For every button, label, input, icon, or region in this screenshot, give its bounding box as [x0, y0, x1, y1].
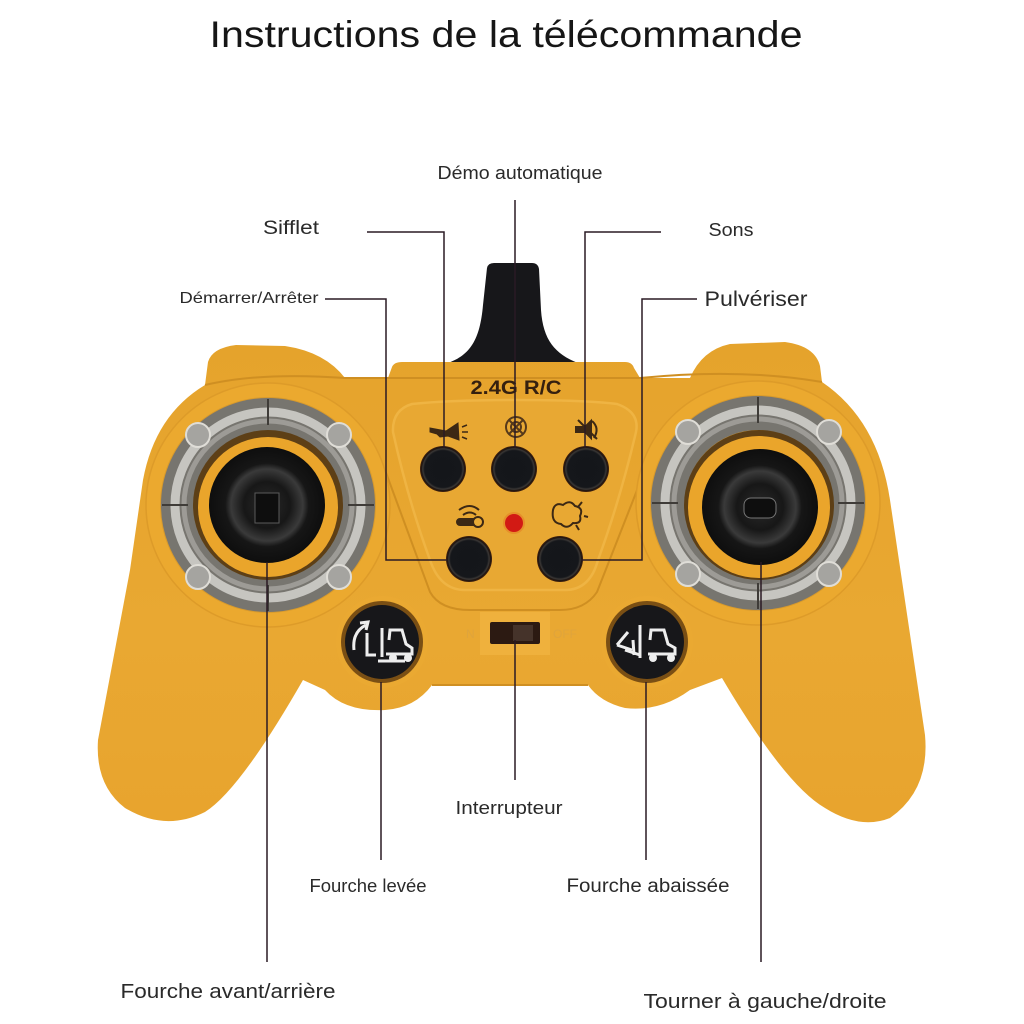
label: 2.4G R/C: 2.4G R/C — [470, 378, 562, 399]
label: Fourche avant/arrière: Fourche avant/arrière — [120, 981, 336, 1003]
body shading — [205, 374, 822, 685]
label: Démo automatique: Démo automatique — [438, 163, 602, 183]
icon: demo — [506, 417, 526, 437]
panel buttons — [420, 446, 609, 582]
callout lines — [267, 200, 761, 962]
right joystick — [636, 381, 880, 625]
remote controller — [98, 263, 926, 822]
label: Fourche levée: Fourche levée — [310, 876, 426, 896]
icon: horn — [430, 423, 468, 440]
label: Démarrer/Arrêter: Démarrer/Arrêter — [180, 290, 319, 307]
label: Interrupteur: Interrupteur — [456, 798, 562, 818]
red LED — [504, 513, 524, 533]
label: Fourche abaissée: Fourche abaissée — [566, 876, 730, 897]
label: Sons: Sons — [708, 220, 754, 240]
icon: sound off — [576, 420, 597, 439]
forklift up button — [336, 596, 428, 688]
power switch: N — [466, 627, 475, 641]
power switch — [466, 612, 577, 655]
label: Tourner à gauche/droite: Tourner à gauche/droite — [644, 991, 886, 1013]
controller body — [98, 342, 926, 822]
button panel — [393, 400, 637, 590]
left joystick — [146, 383, 390, 627]
icon: smoke — [553, 502, 588, 530]
title: Instructions de la télécommande — [210, 14, 802, 55]
power switch: OFF — [553, 627, 577, 641]
icon: spray nozzle — [457, 506, 483, 527]
forklift down button — [601, 596, 693, 688]
antenna — [448, 263, 578, 363]
label: Sifflet: Sifflet — [263, 218, 320, 239]
label: Pulvériser: Pulvériser — [704, 288, 808, 311]
